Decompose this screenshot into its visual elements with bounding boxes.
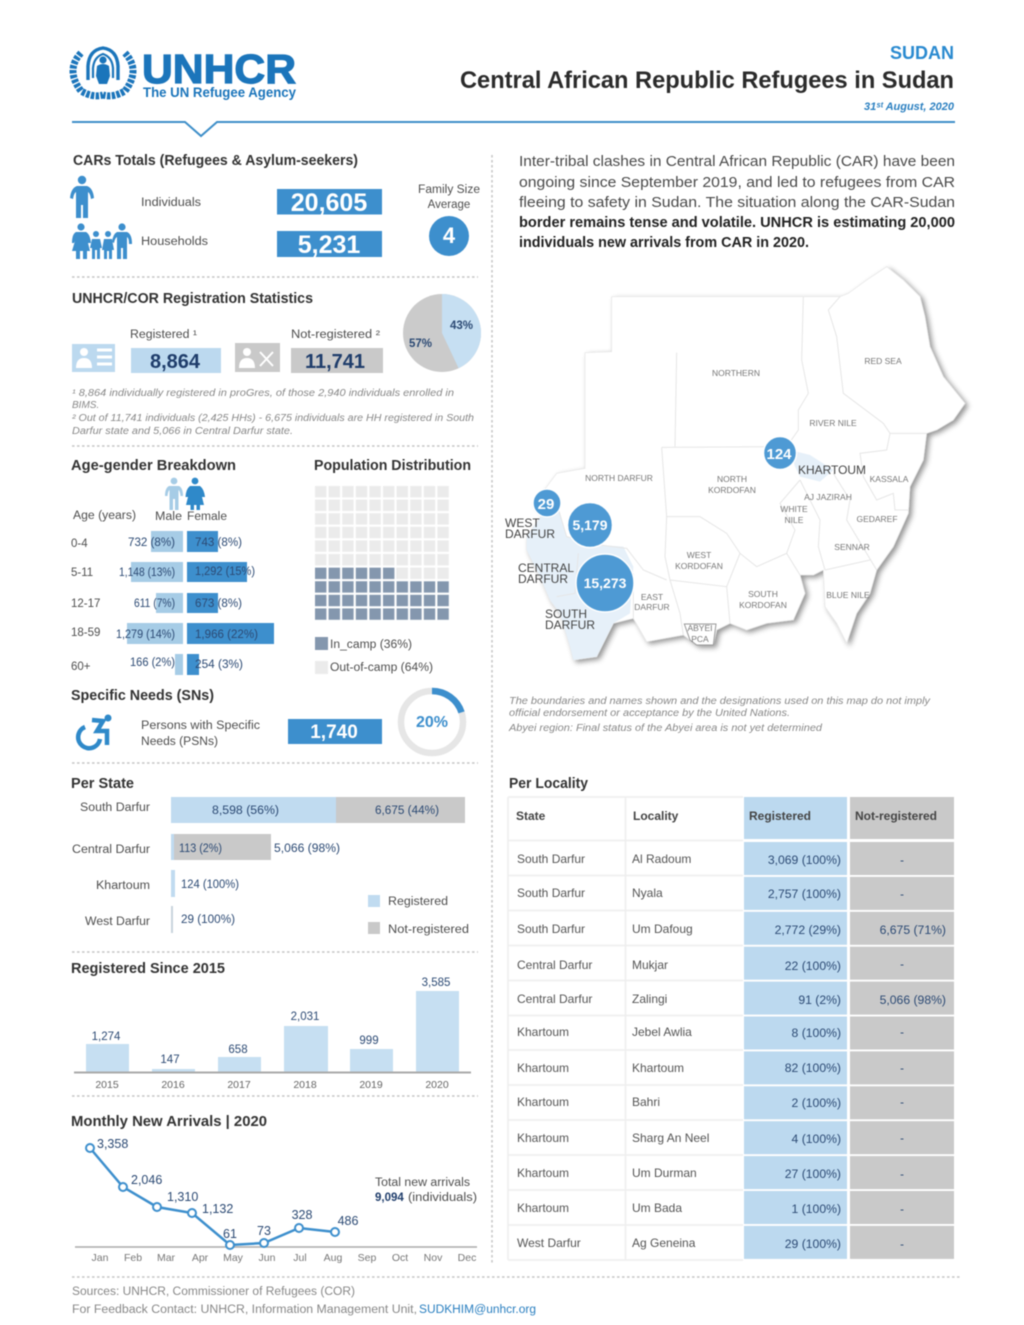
table header: Not-registered [855,809,937,823]
state labels: BLUE NILE [826,590,870,600]
column labels [73,510,227,523]
state labels: SOUTH [545,607,587,621]
panel: registration statistics [72,291,481,437]
bubbles: refugees per state: 29 [538,496,554,513]
legend: Out-of-camp (64%) [330,662,433,674]
stat: family size circle [429,216,469,256]
column chart [74,977,471,1091]
state labels: PCA [691,634,709,644]
text block: map disclaimer: official endorsement or acceptance by the United Nations. [509,708,790,719]
line chart [75,1137,477,1264]
state labels: NORTH [717,474,747,484]
bar chart: age-gender [71,531,274,675]
legend: In_camp (36%) [330,639,412,651]
table body: South Darfur [517,852,585,866]
legend: Not-registered [388,924,469,936]
bar chart: per state: Central Darfur [72,844,150,856]
state labels: SENNAR [834,542,870,552]
table body: 5,066 (98%) [880,993,946,1007]
table body: 82 (100%) [785,1061,841,1075]
footer: sources and contact: For Feedback Contact: UNHCR, Information Management Unit, [72,1304,417,1316]
line chart: 2,046 [131,1173,162,1187]
icon: not-registered card [235,343,280,372]
state labels: NORTHERN [712,368,760,378]
column labels: Age (years) [73,510,136,522]
heading: Age-gender Breakdown [71,458,236,474]
table body: Central Darfur [517,992,592,1006]
donut chart: 20%: 20% [416,714,448,731]
stat: not-registered: 11,741 [305,351,365,373]
table body: Al Radoum [632,852,691,866]
table header: State [516,809,546,823]
panel: CARs totals [70,153,480,259]
table body: Sharg An Neel [632,1131,709,1145]
table body: Khartoum [517,1166,569,1180]
panel: age-gender breakdown [71,458,274,675]
table body: Khartoum [517,1201,569,1215]
column chart: 2018 [293,1079,317,1091]
bar chart: age-gender: 254 (3%) [195,659,243,671]
table body: Khartoum [632,1061,684,1075]
heading: Population Distribution [314,458,471,474]
label: persons with specific needs: Persons with Specific [141,720,260,732]
label: family size average [418,184,480,211]
pie chart: registered share [403,294,481,372]
bubbles: refugees per state [533,436,796,612]
table body: - [900,889,904,901]
column chart: 2015 [95,1079,119,1091]
logo wordmark: UNHCR [142,46,296,92]
icon: male [165,478,183,510]
line chart: 61 [223,1227,237,1241]
bar chart: age-gender: 5-11 [71,567,93,579]
bar chart: age-gender: 18-59 [71,627,100,639]
table body: Khartoum [517,1025,569,1039]
stat: registered: 8,864 [150,351,201,373]
column chart: 2016 [161,1079,185,1091]
table body: 6,675 (71%) [880,923,946,937]
heading: Specific Needs (SNs) [71,688,214,704]
stat: not-registered [291,348,383,373]
heading: Registered Since 2015 [71,961,225,977]
table body: Zalingi [632,992,667,1006]
label: not-registered: Not-registered ² [291,329,380,341]
bar chart: age-gender: 1,279 (14%) [116,629,175,641]
table body: 3,069 (100%) [768,853,841,867]
table body: 2,757 (100%) [768,887,841,901]
footnotes: ¹ 8,864 individually registered in proGres, of those 2,940 individuals enrolled in [72,388,454,399]
callout: total new arrivals: Total new arrivals [375,1177,470,1189]
stat: PSNs [288,719,382,744]
text block: intro paragraph: border remains tense and volatile. UNHCR is estimating 20,000 [519,215,955,231]
state labels: KORDOFAN [708,485,756,495]
bar chart: age-gender: 611 (7%) [134,598,175,610]
text block: map disclaimer [508,696,931,734]
panel: specific needs [71,688,463,753]
bar chart: per state: West Darfur [85,916,150,928]
table body: Ag Geneina [632,1236,696,1250]
bar chart: age-gender: 673 (8%) [195,598,242,610]
line chart: Dec [458,1252,476,1264]
line chart: May [223,1252,244,1264]
icon: UNHCR emblem [73,48,133,96]
icon: individual [70,176,94,218]
table body: - [900,1097,904,1109]
state labels: AJ JAZIRAH [804,492,852,502]
line chart: Apr [192,1252,209,1264]
stat: individuals: 20,605 [291,189,367,217]
text block: map disclaimer: Abyei region: Final status of the Abyei area is not yet determined [508,723,822,734]
callout: total new arrivals [375,1177,477,1204]
column chart: 2017 [227,1079,251,1091]
table body: 2,772 (29%) [775,923,841,937]
table body: - [900,1133,904,1145]
state labels: DARFUR [518,572,568,586]
state labels: CENTRAL [518,561,574,575]
table body: 1 (100%) [792,1202,841,1216]
pie chart: registered share: 43% [450,320,473,332]
bar chart: per state: 124 (100%) [181,879,239,891]
table body: 8 (100%) [792,1026,841,1040]
line chart: Jan [92,1252,109,1264]
footnotes [72,388,474,437]
state labels: DARFUR [505,527,555,541]
state labels: RED SEA [864,356,902,366]
column chart: 658 [228,1044,248,1056]
state labels: NILE [785,515,804,525]
bar chart: age-gender: 1,292 (15%) [195,566,255,578]
header rule with chevron [72,122,955,136]
panel: monthly new arrivals [71,1114,477,1264]
main title: Central African Republic Refugees in Sudan [460,67,954,94]
text block: map disclaimer: The boundaries and names shown and the designations used on this map do not imply [509,696,931,707]
table body: South Darfur [517,886,585,900]
line chart: 486 [338,1214,358,1228]
text block: intro paragraph: ongoing since September 2019, and led to refugees from CAR [519,175,955,191]
table body: Nyala [632,886,663,900]
line chart: 1,132 [202,1202,233,1216]
line chart: Aug [324,1252,342,1264]
stat: PSNs: 1,740 [310,722,358,743]
callout: total new arrivals: (individuals) [408,1192,477,1204]
label: individuals: Individuals [141,197,201,209]
table body: - [900,1063,904,1075]
table body: - [900,1204,904,1216]
state labels: KORDOFAN [675,561,723,571]
table body: Khartoum [517,1131,569,1145]
line chart: Oct [392,1252,408,1264]
panel: per state [71,776,469,936]
legend: Registered [388,896,448,908]
line chart: Jun [259,1252,276,1264]
table body: - [900,959,904,971]
map: Sudan states [505,267,965,660]
bar chart: age-gender: 732 (8%) [128,537,175,549]
state labels: RIVER NILE [809,418,857,428]
line chart: Mar [157,1252,176,1264]
column chart: 999 [359,1035,379,1047]
bar chart: age-gender: 166 (2%) [130,657,175,669]
donut chart: 20% [401,691,463,753]
table body: 91 (2%) [798,993,841,1007]
callout: total new arrivals: 9,094 [375,1192,404,1204]
label: persons with specific needs: Needs (PSNs) [141,736,218,748]
table body: Jebel Awlia [632,1025,692,1039]
vertical divider [491,155,493,1265]
table body: Mukjar [632,958,668,972]
column chart: 1,274 [92,1031,121,1043]
column chart: 2,031 [291,1011,319,1023]
heading: UNHCR/COR Registration Statistics [72,291,313,307]
line chart: Feb [124,1252,142,1264]
bubbles: refugees per state: 124 [766,446,792,463]
panel: population distribution [314,458,471,674]
text block: intro paragraph [519,154,955,251]
state labels: KORDOFAN [739,600,787,610]
column chart: 3,585 [422,977,450,989]
state labels: SOUTH [748,589,778,599]
table body: - [900,855,904,867]
logo tagline: The UN Refugee Agency [143,84,296,100]
footnotes: Darfur state and 5,066 in Central Darfur state. [72,426,293,437]
column labels: Female [187,511,227,523]
state labels [505,356,909,644]
bar chart: age-gender: 12-17 [71,598,100,610]
icon: registered card [72,344,115,372]
state labels: GEDAREF [856,514,898,524]
footnotes: ² Out of 11,741 individuals (2,425 HHs) - 6,675 individuals are HH registered in South [72,413,474,424]
table body: West Darfur [517,1236,581,1250]
table body: Khartoum [517,1061,569,1075]
line chart: 3,358 [97,1137,128,1151]
table body: 22 (100%) [785,959,841,973]
table body: Bahri [632,1095,660,1109]
bar chart: per state: 6,675 (44%) [375,805,439,817]
state labels: WEST [505,516,540,530]
text block: intro paragraph: fleeing to safety in Sudan. The situation along the CAR-Sudan [519,195,955,211]
heading: Per Locality [509,776,588,792]
date: 31ˢᵗ August, 2020 [864,101,955,113]
table body: - [900,1169,904,1181]
label: persons with specific needs [141,720,260,748]
table header: Registered [749,809,811,823]
table header [516,797,954,839]
heading: Monthly New Arrivals | 2020 [71,1114,267,1130]
legend [315,637,433,674]
legend [368,895,469,936]
column labels: Male [155,511,182,523]
line chart: 73 [257,1224,271,1238]
heading: Per State [71,776,134,792]
state labels: NORTH DARFUR [585,473,653,483]
waffle chart [315,486,451,622]
label: registered: Registered ¹ [130,329,197,341]
table body: 29 (100%) [785,1237,841,1251]
stat: family size circle: 4 [443,223,456,248]
footnotes: BIMS. [72,400,99,411]
bubbles: refugees per state: 15,273 [584,575,627,591]
bar chart: age-gender: 1,148 (13%) [119,567,175,579]
bubbles: refugees per state: 5,179 [572,517,608,533]
table body: 4 (100%) [792,1132,841,1146]
state labels: DARFUR [634,602,670,612]
state labels: EAST [641,592,663,602]
table body: - [900,1239,904,1251]
table body: - [900,1027,904,1039]
panel: per locality table [508,776,954,1260]
table body: Khartoum [517,1095,569,1109]
bar chart: age-gender: 0-4 [71,538,88,550]
table header: Locality [633,809,679,823]
state labels: KASSALA [870,474,909,484]
line chart: Jul [293,1252,307,1264]
text block: intro paragraph: Inter-tribal clashes in Central African Republic (CAR) have been [519,154,955,170]
stat: registered [131,348,221,373]
heading: CARs Totals (Refugees & Asylum-seekers) [73,153,358,169]
table body: Um Bada [632,1201,682,1215]
table body: Um Durman [632,1166,697,1180]
footer: sources and contact: SUDKHIM@unhcr.org [419,1304,536,1316]
bar chart: per state: 29 (100%) [181,914,235,926]
bar chart: per state: Khartoum [96,880,150,892]
state labels: WHITE [780,504,808,514]
stat: households: 5,231 [298,231,360,259]
bar chart: age-gender: 743 (8%) [195,537,242,549]
table body: 2 (100%) [792,1096,841,1110]
bar chart: per state: 113 (2%) [179,843,222,855]
label: family size average: Average [428,199,470,211]
bar chart: per state: 5,066 (98%) [274,843,340,855]
table body: South Darfur [517,922,585,936]
logo: UNHCR [73,46,296,100]
bar chart: age-gender: 1,966 (22%) [195,629,258,641]
bar chart: age-gender: 60+ [71,661,91,673]
table body: Central Darfur [517,958,592,972]
map base [527,267,965,660]
text block: intro paragraph: individuals new arrivals from CAR in 2020. [519,235,809,251]
state labels: WEST [687,550,711,560]
line chart: Nov [424,1252,443,1264]
state labels: DARFUR [545,618,595,632]
icon: female [186,478,205,510]
pie chart: registered share: 57% [409,338,432,350]
table body [508,797,954,1260]
bar chart: per state [72,797,465,933]
icon: household [72,223,132,259]
footer: sources and contact [72,1286,536,1316]
label: family size average: Family Size [418,184,480,196]
state labels: KHARTOUM [798,463,866,477]
table body: Um Dafoug [632,922,693,936]
column chart: 147 [160,1054,180,1066]
stat: households [277,231,382,259]
panel: registered since 2015 [71,961,471,1091]
footer: sources and contact: Sources: UNHCR, Commissioner of Refugees (COR) [72,1286,355,1298]
column chart: 2020 [425,1079,449,1091]
state labels: ABYEI [687,623,713,633]
bar chart: per state: South Darfur [80,802,150,814]
line chart: Sep [358,1252,376,1264]
label: households: Households [141,236,208,248]
line chart: 328 [292,1208,312,1222]
line chart: 1,310 [167,1190,198,1204]
column chart: 2019 [359,1079,383,1091]
table body: 27 (100%) [785,1167,841,1181]
bar chart: per state: 8,598 (56%) [212,805,279,817]
title block [460,43,955,113]
icon: wheelchair [78,714,112,748]
country label: SUDAN [890,43,954,63]
